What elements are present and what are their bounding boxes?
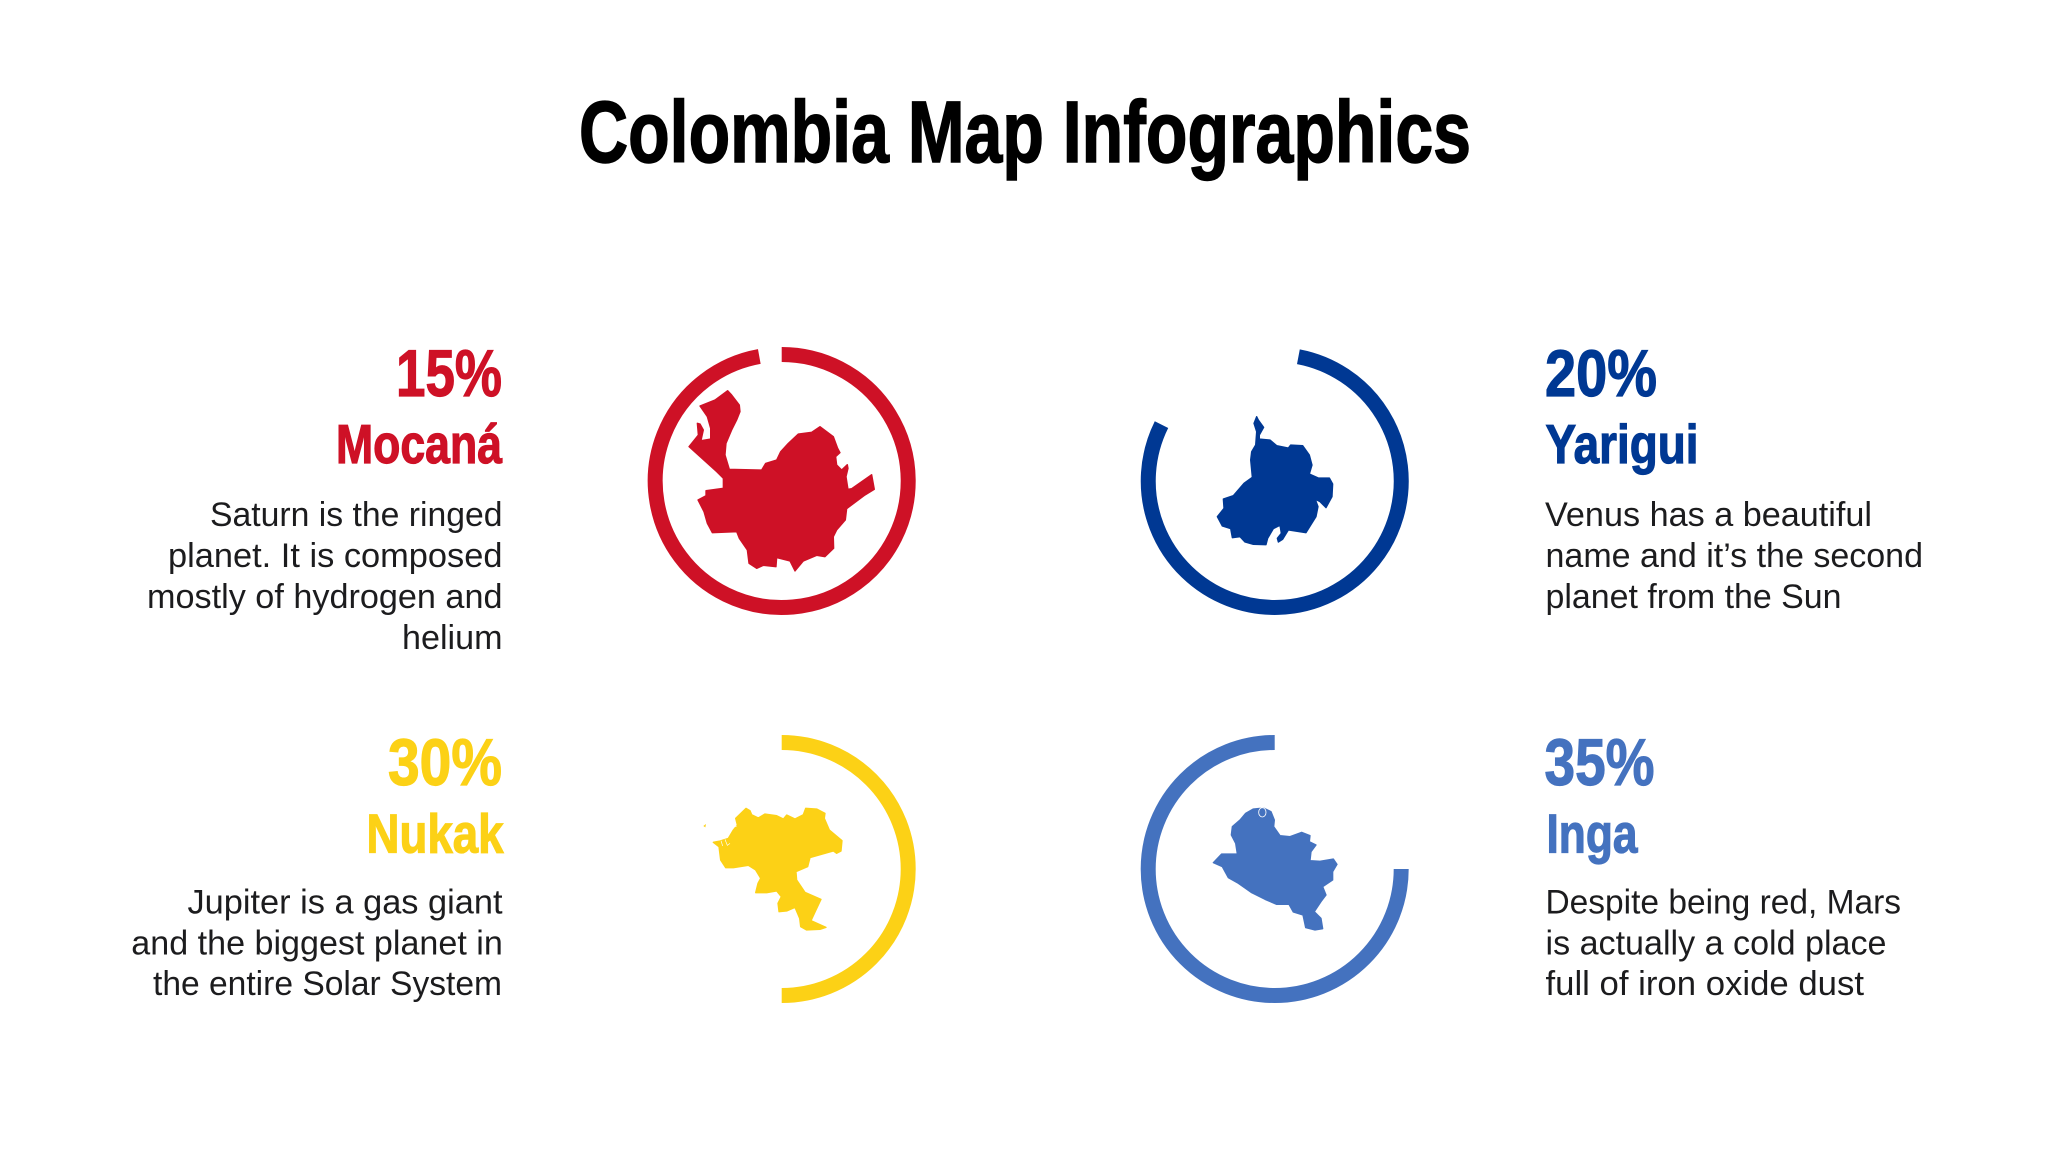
description: Mocaná: helium <box>402 619 502 657</box>
description: Nukak <box>131 883 503 1003</box>
description: Nukak: the entire Solar System <box>153 965 502 1003</box>
description: Nukak: Jupiter is a gas giant <box>188 883 503 921</box>
heading: Inga: Inga <box>1546 803 1638 865</box>
text block: Mocaná <box>147 336 502 657</box>
title: Colombia Map Infographics <box>579 84 1471 181</box>
progress ring: 30% yellow <box>782 742 908 996</box>
text block: Inga <box>1544 725 1901 1003</box>
map: Mocaná region <box>689 391 874 571</box>
description: Mocaná <box>147 496 502 657</box>
map: Inga region <box>1213 808 1337 930</box>
description: Yarigui: name and it’s the second <box>1546 537 1923 575</box>
description: Inga: full of iron oxide dust <box>1546 965 1865 1003</box>
description: Yarigui: Venus has a beautiful <box>1545 496 1872 534</box>
description: Inga <box>1546 883 1901 1003</box>
description: Nukak: and the biggest planet in <box>131 924 503 962</box>
description: Mocaná: planet. It is composed <box>168 537 502 575</box>
description: Mocaná: mostly of hydrogen and <box>147 578 502 616</box>
percentage: 30%: 30% <box>388 725 502 799</box>
percentage: 20%: 20% <box>1545 336 1657 410</box>
heading: Yarigui: Yarigui <box>1546 413 1698 475</box>
description: Yarigui <box>1545 496 1923 616</box>
heading: Mocaná: Mocaná <box>336 413 502 475</box>
progress ring: 20% navy <box>1148 357 1401 607</box>
text block: Yarigui <box>1545 336 1923 616</box>
description: Inga: Despite being red, Mars <box>1546 883 1901 921</box>
heading: Nukak: Nukak <box>366 803 504 865</box>
panel: Inga <box>1148 725 1901 1003</box>
percentage: 15%: 15% <box>396 336 502 410</box>
description: Yarigui: planet from the Sun <box>1546 578 1842 616</box>
description: Inga: is actually a cold place <box>1546 924 1886 962</box>
map: Yarigui region <box>1217 417 1333 545</box>
description: Mocaná: Saturn is the ringed <box>210 496 502 534</box>
islet <box>703 824 706 827</box>
panel: Yarigui <box>1148 336 1923 616</box>
text block: Nukak <box>131 725 504 1003</box>
progress ring: 35% blue <box>1148 742 1401 996</box>
panel: Nukak <box>131 725 908 1003</box>
panel: Mocaná <box>147 336 908 657</box>
percentage: 35%: 35% <box>1544 725 1654 799</box>
progress ring: 15% red <box>655 354 908 608</box>
map: Nukak region <box>703 808 842 930</box>
